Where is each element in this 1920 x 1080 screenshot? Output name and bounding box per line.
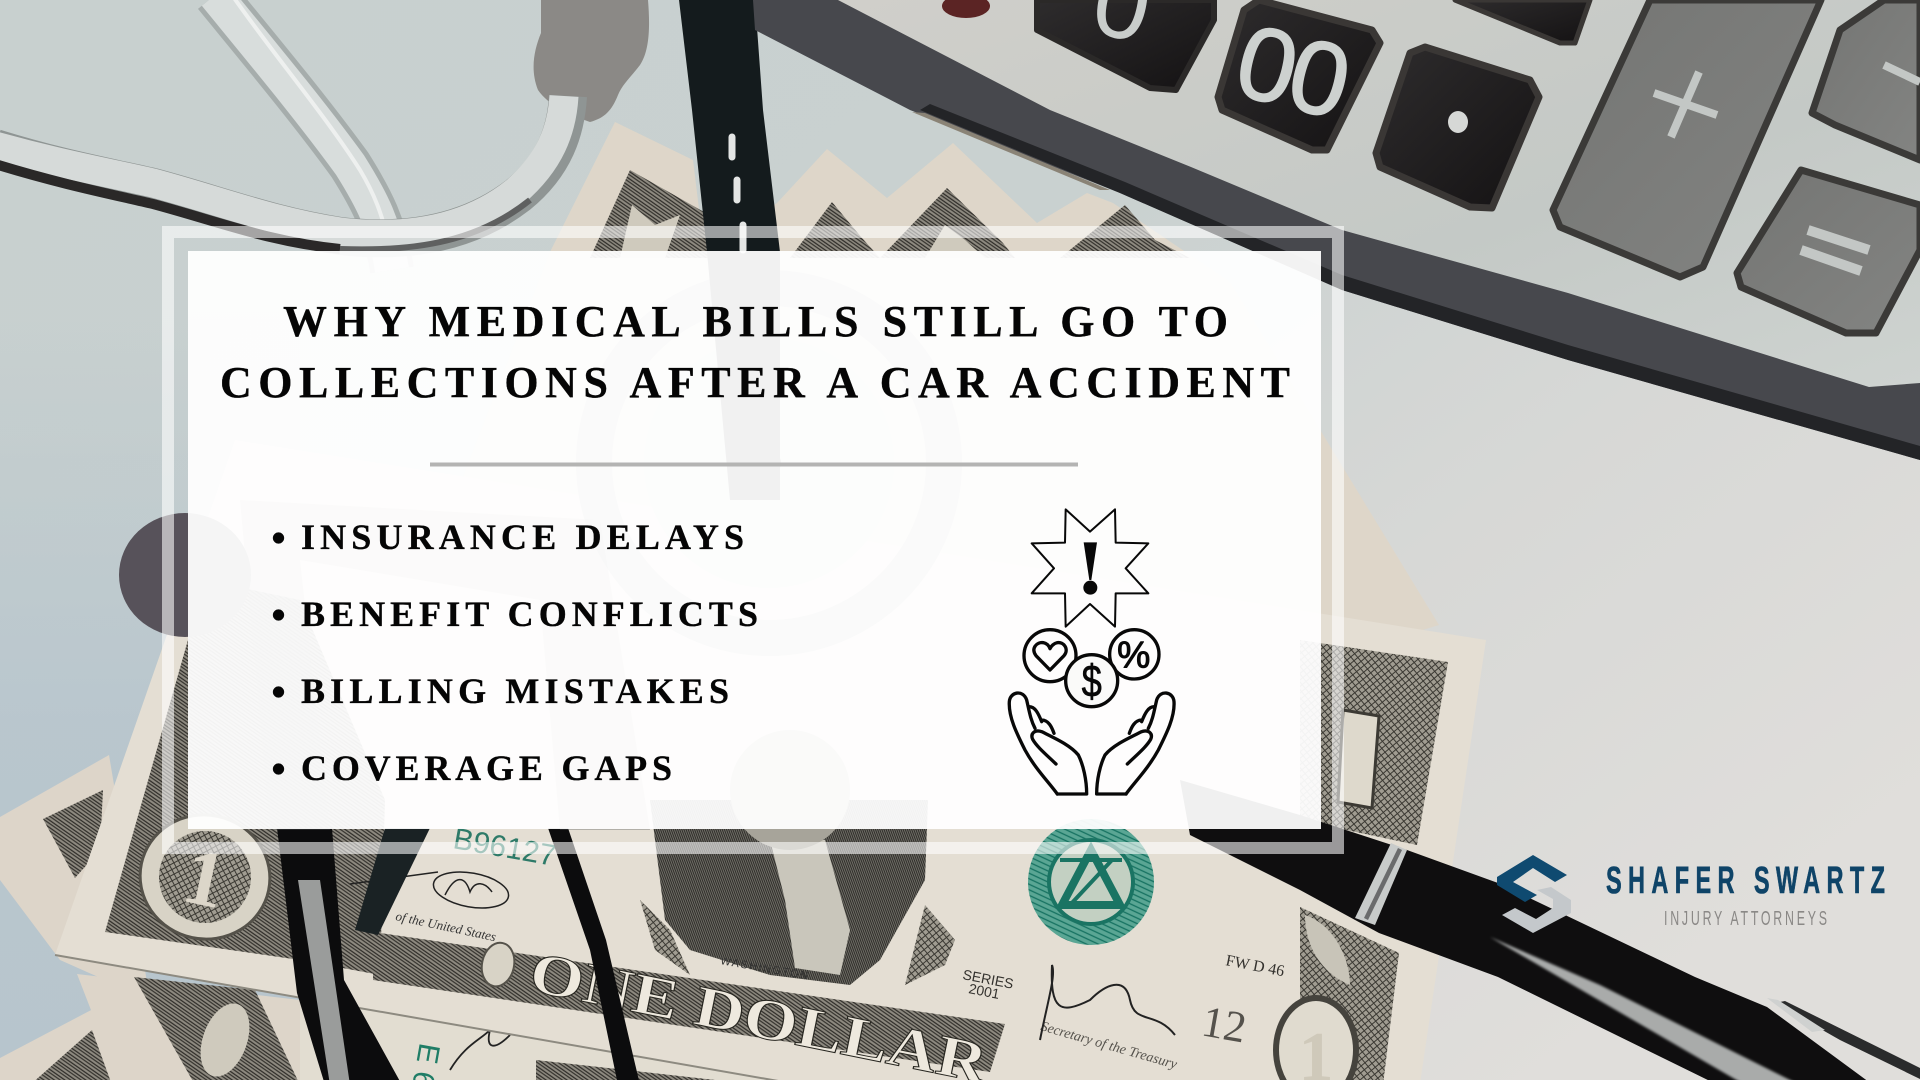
bill signature: [350, 867, 511, 913]
icon: percent coin: [1110, 630, 1159, 679]
logo name: SHAFER SWARTZ: [1606, 858, 1885, 901]
icon: heart coin: [1024, 630, 1076, 682]
bill engraving: left corner: [105, 580, 385, 975]
series text: 12: [1198, 997, 1250, 1052]
fan of dollar bills behind: [300, 122, 1439, 800]
stethoscope black tubes bottom: [240, 500, 650, 1080]
serial number: B96127: [451, 822, 558, 873]
calculator key 0: [1037, 0, 1214, 90]
list item: benefit conflicts: BENEFIT CONFLICTS: [301, 594, 758, 634]
icon: alert star: [1032, 509, 1148, 627]
bill numeral oval: 1: [176, 832, 233, 926]
icon: percent coin: %: [1117, 634, 1150, 676]
calculator minus key: [1812, 0, 1920, 160]
calculator key 00: 00: [1225, 3, 1358, 141]
stethoscope grey eartip: [534, 0, 649, 122]
bill engraving: right side: [1276, 640, 1448, 1080]
banner ONE DOLLAR: WASHINGTON: [719, 955, 810, 983]
treasury seal: [1028, 819, 1154, 945]
lower left bills: [0, 755, 850, 1080]
banner ONE DOLLAR: [373, 932, 1005, 1080]
calculator key decimal point: [1376, 47, 1539, 208]
stethoscope clear tube: [215, 0, 392, 270]
logo tagline: INJURY ATTORNEYS: [1664, 907, 1827, 930]
pen: [1180, 780, 1920, 1080]
banner ONE DOLLAR: ONE DOLLAR: [524, 939, 994, 1080]
divider line: [430, 462, 1078, 466]
icon: right hand: [1097, 693, 1174, 794]
panel: main content card: [188, 251, 1321, 829]
stethoscope black tube top: [679, 0, 780, 500]
logo: Shafer Swartz Injury Attorneys: [1497, 855, 1885, 933]
series text: SERIES: [961, 966, 1015, 992]
list item: coverage gaps: COVERAGE GAPS: [301, 748, 672, 788]
icon: alert star, coins and open hands: [1009, 509, 1174, 794]
treasurer signature: [1040, 965, 1175, 1040]
icon: dollar coin: $: [1082, 656, 1102, 707]
calculator body: [753, 0, 1920, 460]
logo mark: [1497, 855, 1571, 933]
series text: FW D 46: [1224, 952, 1286, 980]
stethoscope metal tube: [0, 96, 568, 249]
icon: left hand: [1009, 693, 1087, 794]
calculator equals key: [1737, 170, 1920, 333]
bullet list: [273, 517, 758, 788]
list item: billing mistakes: BILLING MISTAKES: [301, 671, 729, 711]
portrait of Washington: [640, 730, 955, 985]
title: COLLECTIONS AFTER A CAR ACCIDENT: [220, 358, 1290, 407]
bill numeral oval: [129, 803, 281, 951]
main dollar bill: [55, 440, 1486, 1080]
calculator red key: [942, 0, 990, 18]
stethoscope dark ball: [119, 513, 251, 637]
list item: insurance delays: INSURANCE DELAYS: [301, 517, 744, 557]
title: [220, 297, 1290, 407]
title: WHY MEDICAL BILLS STILL GO TO: [283, 297, 1228, 346]
series text: 2001: [967, 980, 1001, 1002]
series text: Secretary of the Treasury: [1039, 1019, 1179, 1073]
calculator plus key: [1553, 0, 1821, 277]
series text: [961, 952, 1286, 1073]
calculator key top: [1455, 0, 1590, 43]
panel outer translucent frame: [162, 226, 1344, 854]
stethoscope chest piece: [594, 288, 944, 638]
small print: of the United States: of the United States: [394, 908, 497, 944]
icon: dollar coin: [1066, 655, 1118, 707]
